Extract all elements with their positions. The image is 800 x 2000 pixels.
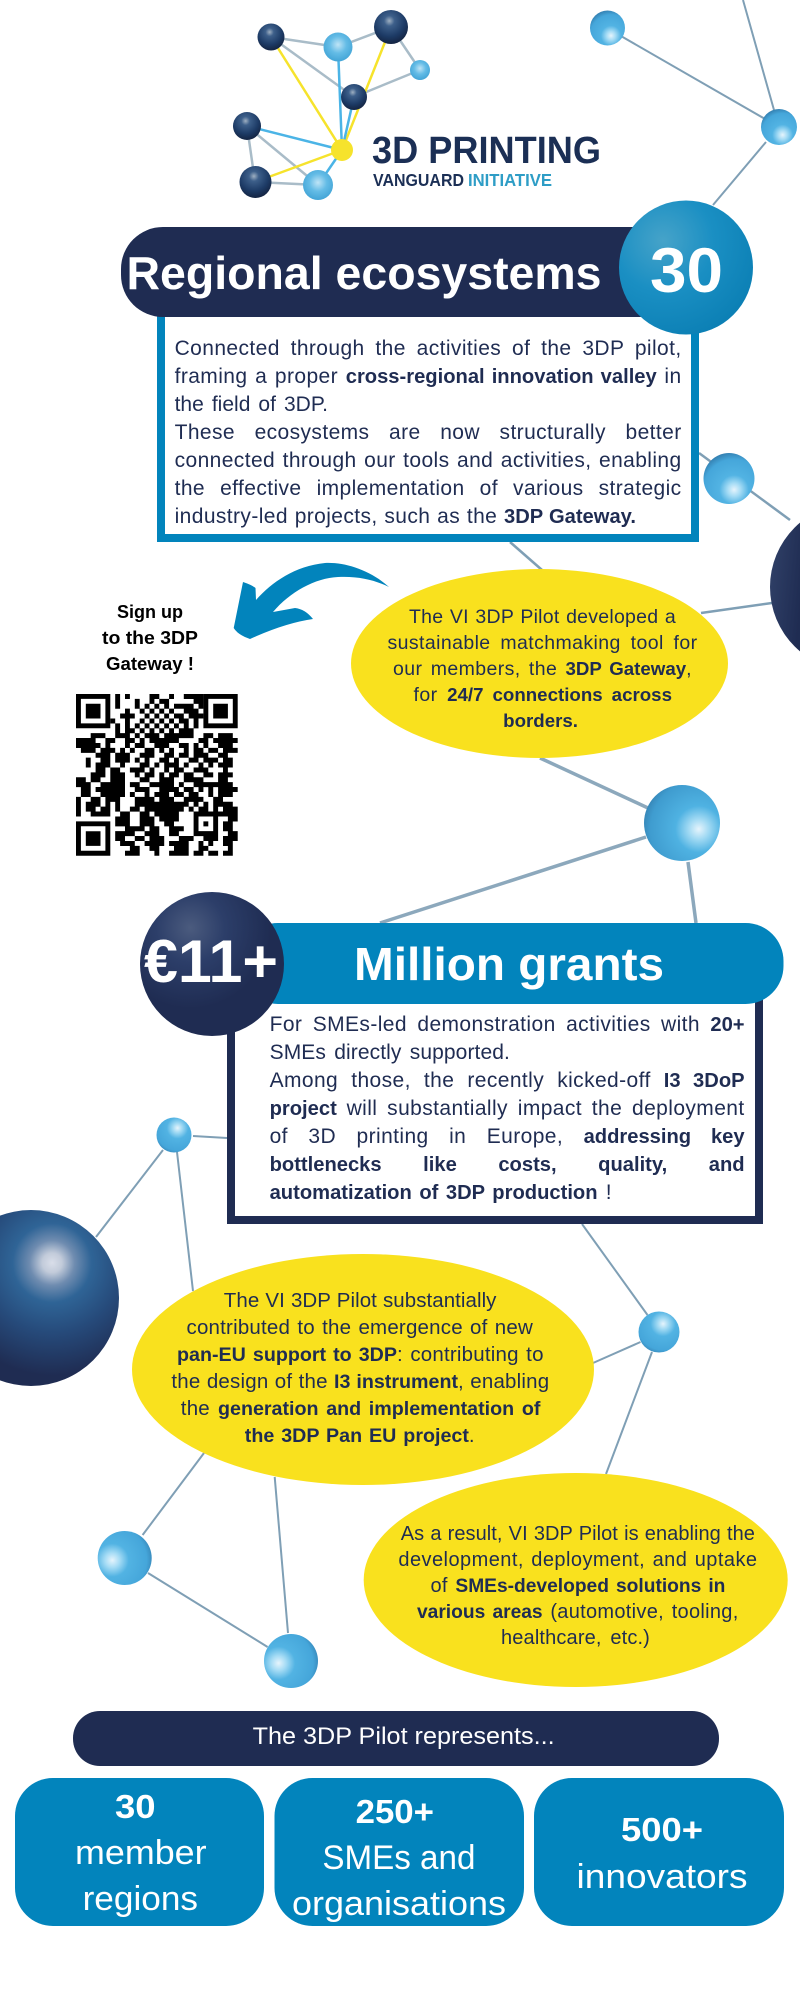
stat card: 500+ innovators: 500+ (621, 1811, 703, 1848)
text block: matchmaking tool ellipse: for 24/7 connections across (414, 684, 672, 706)
text block: pan-EU support ellipse: the design of the I3 instrument, enabling (171, 1370, 549, 1393)
logo: 3D Printing Vanguard Initiative: 3D PRINTING (372, 130, 601, 172)
text block: million grants description: bottlenecks like costs, quality, and (270, 1154, 745, 1176)
text block: pan-EU support ellipse: contributed to the emergence of new (186, 1316, 533, 1339)
text block: SME solutions ellipse (398, 1523, 757, 1649)
sphere: right light (761, 109, 797, 145)
text block: pan-EU support ellipse (171, 1289, 549, 1447)
sphere: beside first box (704, 453, 754, 504)
text block: regional ecosystems description: framing a proper cross-regional innovation valley in (175, 364, 682, 388)
text block: pan-EU support ellipse: the generation and implementation of (181, 1397, 540, 1420)
logo: 3D Printing Vanguard Initiative: VANGUARD (373, 170, 464, 190)
text block: million grants description: project will substantially impact the deployment (270, 1096, 745, 1120)
panel: regional ecosystems text box (161, 300, 695, 538)
sphere: lower centre (264, 1634, 318, 1688)
arrow: points to sign-up (234, 563, 389, 639)
banner: The 3DP Pilot represents (73, 1711, 719, 1766)
network lines: background (96, 0, 790, 1647)
text block: million grants description: automatization of 3DP production ! (270, 1180, 612, 1204)
text block: regional ecosystems description: industry-led projects, such as the 3DP Gateway. (175, 504, 636, 528)
stat card: 250+ SMEs and organisations: 250+ (356, 1793, 434, 1830)
number badge: 11 million euro: €11+ (144, 928, 278, 995)
number badge: 30: 30 (650, 236, 723, 306)
sphere: right of second ellipse (638, 1312, 680, 1352)
text block: regional ecosystems description: connected through our tools and activities, enabling (175, 448, 682, 472)
yellow ellipse: SME solutions (364, 1473, 788, 1687)
stat card: 30 member regions: member (75, 1834, 207, 1872)
text block: regional ecosystems description (174, 336, 682, 528)
text block: regional ecosystems description: Connected through the activities of the 3DP pilot, (175, 336, 682, 360)
text: sign up call to action: Gateway ! (106, 654, 194, 674)
logo: 3D Printing Vanguard Initiative (233, 10, 601, 200)
text block: SME solutions ellipse: of SMEs-developed solutions in (430, 1575, 725, 1597)
text block: matchmaking tool ellipse: sustainable matchmaking tool for (388, 632, 698, 654)
text block: regional ecosystems description: the field of 3DP. (175, 392, 328, 416)
number badge: 30 (619, 200, 753, 334)
text block: million grants description: of 3D printing in Europe, addressing key (270, 1124, 745, 1148)
QR code (76, 694, 238, 856)
heading bar: Million grants: Million grants (354, 938, 664, 990)
stat card: 250+ SMEs and organisations: organisations (292, 1885, 506, 1923)
text: sign up call to action (102, 602, 198, 674)
stat card: 30 member regions: 30 (115, 1788, 156, 1825)
text block: SME solutions ellipse: various areas (automotive, tooling, (417, 1601, 739, 1623)
yellow ellipse: pan-EU support (132, 1254, 594, 1485)
heading bar: Regional ecosystems: Regional ecosystems (126, 247, 602, 299)
text block: SME solutions ellipse: healthcare, etc.) (501, 1627, 650, 1649)
stat card: 250+ SMEs and organisations: SMEs and (322, 1839, 475, 1877)
logo: 3D Printing Vanguard Initiative: INITIATIVE (468, 170, 552, 190)
text block: regional ecosystems description: the effective implementation of various strategic (175, 476, 682, 500)
panel: million grants text box (231, 985, 759, 1220)
text block: million grants description: SMEs directly supported. (270, 1040, 510, 1064)
sphere: large navy right edge (770, 503, 800, 671)
stat card: 500+ innovators (534, 1778, 784, 1926)
text block: million grants description: For SMEs-led demonstration activities with 20+ (270, 1012, 745, 1036)
sphere: lower left (98, 1531, 152, 1585)
text block: matchmaking tool ellipse: The VI 3DP Pilot developed a (409, 606, 676, 628)
text: sign up call to action: Sign up (117, 602, 183, 622)
text block: regional ecosystems description: These ecosystems are now structurally better (175, 420, 682, 444)
banner: The 3DP Pilot represents: The 3DP Pilot represents... (253, 1723, 555, 1750)
sphere: top right light (590, 10, 625, 46)
stat card: 30 member regions (15, 1778, 264, 1926)
text block: pan-EU support ellipse: The VI 3DP Pilot substantially (224, 1289, 496, 1312)
text: sign up call to action: to the 3DP (102, 628, 198, 648)
text block: SME solutions ellipse: development, deployment, and uptake (398, 1549, 757, 1571)
stat card: 250+ SMEs and organisations (274, 1778, 524, 1926)
number badge: 11 million euro (140, 892, 284, 1036)
text block: pan-EU support ellipse: pan-EU support to 3DP: contributing to (177, 1343, 544, 1366)
text block: SME solutions ellipse: As a result, VI 3DP Pilot is enabling the (401, 1523, 755, 1545)
text block: pan-EU support ellipse: the 3DP Pan EU project. (245, 1424, 475, 1447)
yellow ellipse: matchmaking tool (351, 569, 728, 758)
text block: million grants description: Among those, the recently kicked-off I3 3DoP (270, 1068, 745, 1092)
text block: matchmaking tool ellipse: our members, the 3DP Gateway, (393, 658, 692, 680)
sphere: large navy left (0, 1210, 119, 1386)
text block: matchmaking tool ellipse (388, 606, 698, 731)
stat card: 500+ innovators: innovators (576, 1858, 748, 1896)
sphere: small left (156, 1118, 192, 1152)
stat card: 30 member regions: regions (83, 1880, 198, 1918)
sphere: centre light (644, 785, 720, 861)
heading bar: Million grants (240, 923, 784, 1004)
text block: million grants description (270, 1012, 745, 1204)
text block: matchmaking tool ellipse: borders. (503, 710, 578, 731)
heading bar: Regional ecosystems (121, 227, 681, 317)
